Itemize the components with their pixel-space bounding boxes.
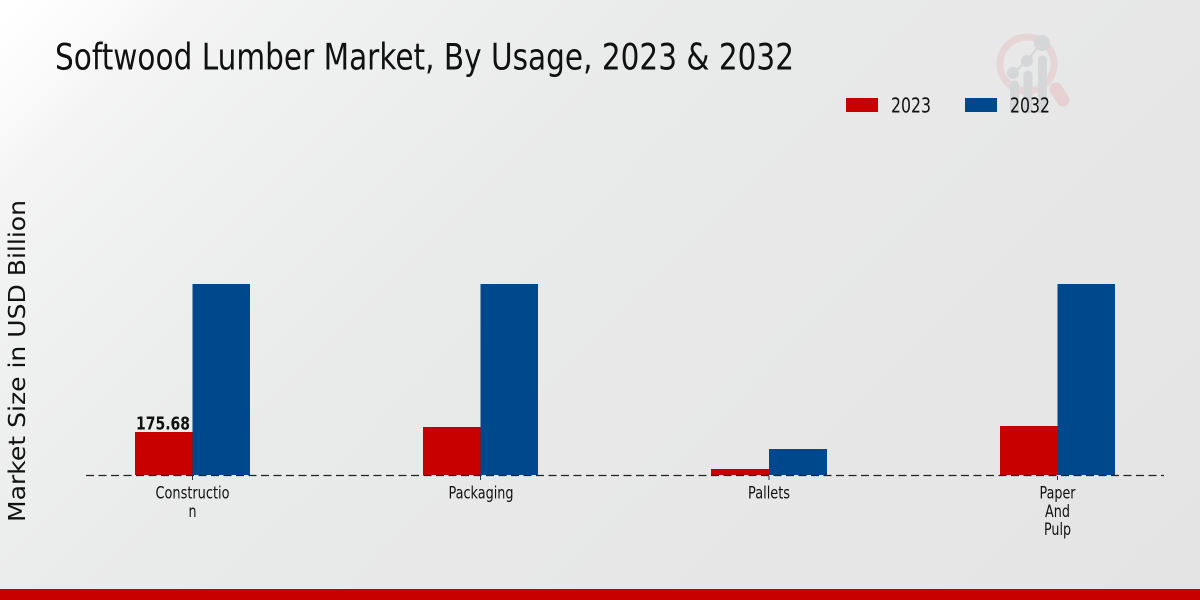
category label: Paper And Pulp: Paper <box>1040 484 1076 504</box>
category label: Pallets: Pallets <box>748 484 790 504</box>
value label: 175.68 <box>136 414 190 434</box>
x axis baseline <box>86 476 1164 480</box>
group: Paper And Pulp <box>1000 284 1115 475</box>
category label: Paper And Pulp: And <box>1045 502 1070 522</box>
group: Packaging <box>423 284 538 475</box>
group: Pallets <box>711 449 827 475</box>
legend item: 2023: 2023 <box>891 94 931 118</box>
category label: Paper And Pulp <box>1040 484 1076 540</box>
watermark logo icon <box>1000 35 1063 113</box>
bar chart <box>135 284 1115 475</box>
category label: Construction <box>156 484 230 522</box>
legend item: 2032 <box>965 94 1050 118</box>
legend item: 2032: 2032 <box>1010 94 1050 118</box>
category label: Construction: n <box>188 502 196 522</box>
footer bar <box>0 589 1200 600</box>
title: Softwood Lumber Market, By Usage, 2023 & 2032 <box>55 36 794 78</box>
legend item: 2023 <box>846 94 931 118</box>
category label: Packaging: Packaging <box>448 484 514 504</box>
legend <box>846 94 1050 118</box>
group: Construction <box>135 284 250 475</box>
category label: Paper And Pulp: Pulp <box>1044 520 1071 540</box>
y axis label: Market Size in USD Billion <box>3 200 31 522</box>
category label: Construction: Constructio <box>156 484 230 504</box>
